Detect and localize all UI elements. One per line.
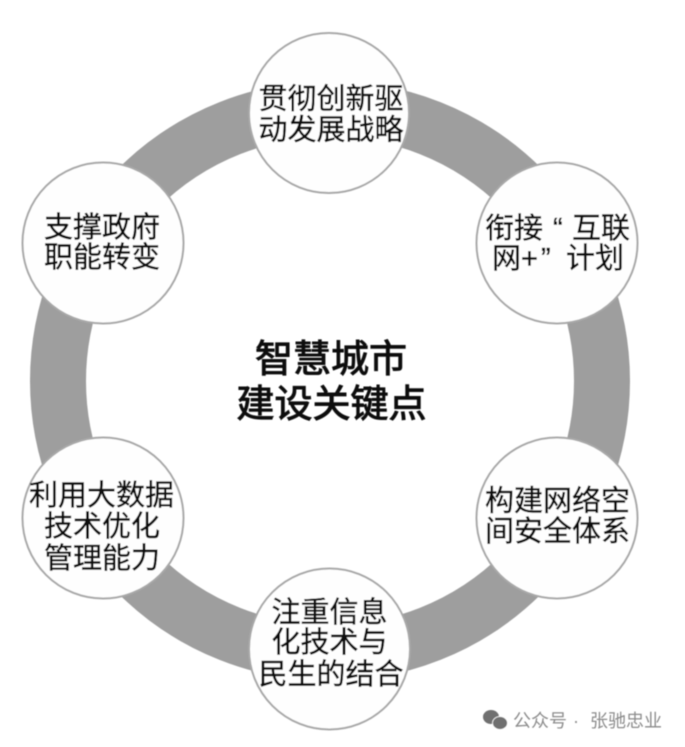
center title: 智慧城市	[255, 339, 407, 381]
node: bottom: 注重信息	[271, 596, 388, 629]
icon: chat bubbles	[483, 710, 508, 730]
center title: 建设关键点	[236, 384, 427, 426]
watermark: 公众号	[513, 711, 567, 731]
center title	[236, 339, 427, 426]
node: bottom: 民生的结合	[258, 658, 404, 691]
node: lower left	[22, 438, 184, 598]
node: top	[249, 33, 409, 193]
watermark: ·	[573, 711, 579, 731]
node: lower left: 管理能力	[44, 542, 160, 575]
node: bottom: 化技术与	[271, 626, 388, 659]
node: upper left: 职能转变	[44, 241, 160, 274]
watermark	[483, 710, 662, 731]
node: upper left	[22, 162, 184, 324]
node: upper right	[476, 162, 638, 324]
node: top: 贯彻创新驱	[258, 82, 404, 116]
node: upper left: 支撑政府	[44, 211, 160, 244]
node: lower right: 间安全体系	[485, 515, 630, 548]
node: lower right	[476, 438, 638, 598]
node: lower left: 利用大数据	[29, 479, 174, 512]
node: upper right: 网+”计划	[492, 242, 624, 275]
node: lower right: 构建网络空	[485, 484, 630, 518]
node: upper right: 衔接“互联	[485, 212, 630, 245]
node: lower left: 技术优化	[44, 510, 160, 543]
watermark: 张驰忠业	[590, 711, 662, 731]
gray ring	[58, 109, 602, 653]
node: bottom	[249, 568, 410, 730]
node: top: 动发展战略	[258, 114, 404, 146]
